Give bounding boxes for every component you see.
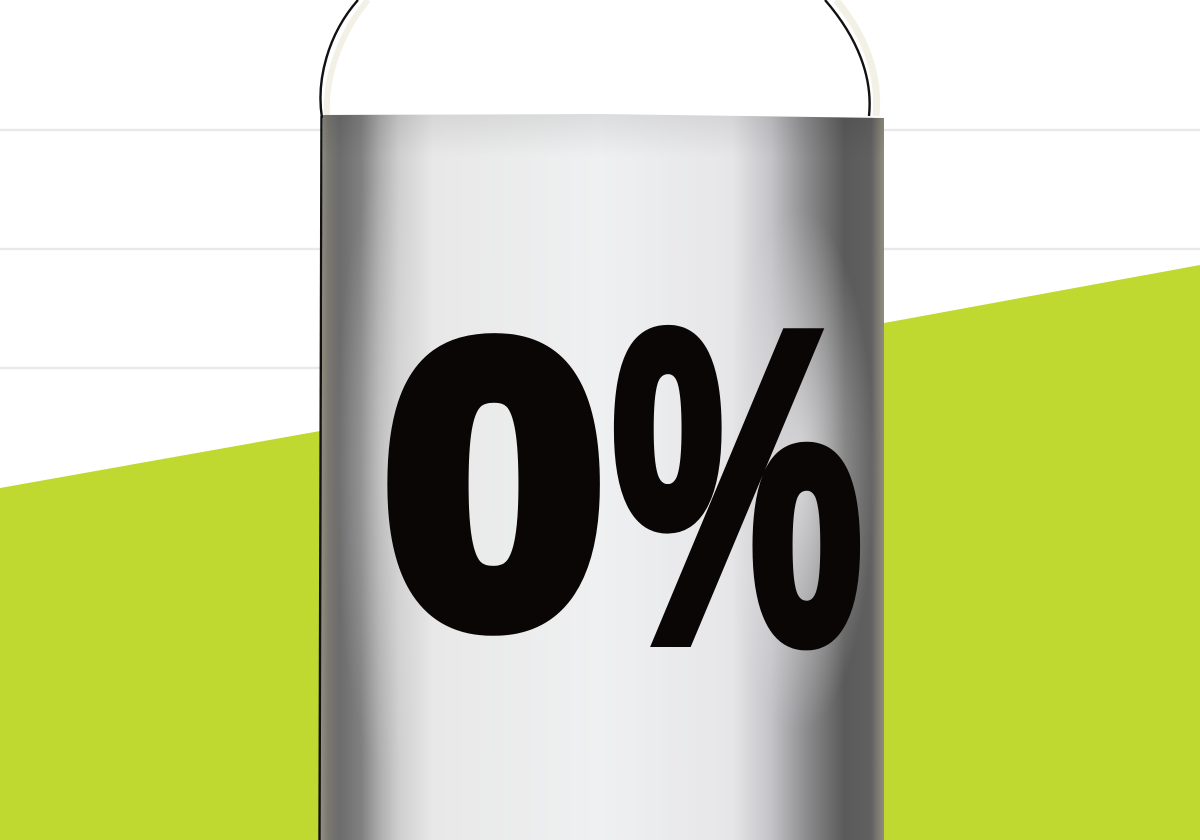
bottle body [320, 114, 884, 840]
percent sign: % [612, 242, 862, 733]
chart background: grid lines [0, 130, 1200, 368]
digit 0: 0 [386, 268, 602, 701]
rising green area [0, 265, 1200, 840]
label: 0% [386, 242, 862, 733]
bottle neck [320, 0, 877, 118]
